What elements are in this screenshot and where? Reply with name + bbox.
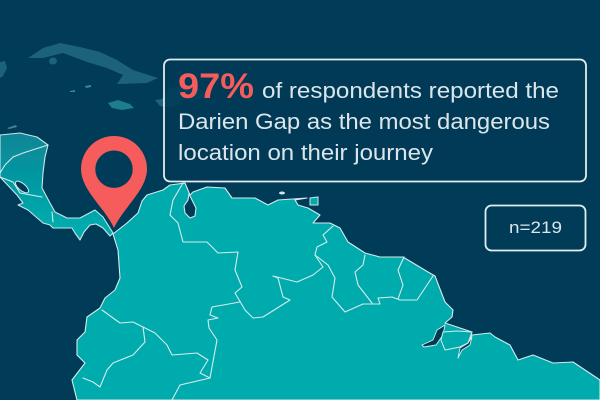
island: Hispaniola	[155, 85, 207, 108]
island: Isle of Youth	[49, 58, 57, 64]
Amazon delta channels	[422, 325, 472, 358]
island: Cuba	[28, 43, 158, 84]
island: Margarita	[279, 192, 285, 194]
sample size box	[486, 206, 586, 250]
country borders	[0, 145, 433, 400]
border: Ecuador and Peru	[83, 327, 145, 387]
text line 2: Darien Gap as the most dangerous	[178, 109, 550, 134]
text line 3: location on their journey	[178, 140, 433, 165]
sample size label: n=219	[509, 218, 562, 237]
island: Jamaica	[108, 100, 134, 110]
border: Guyana and Suriname	[355, 255, 372, 303]
border: Central America	[0, 145, 53, 222]
callout box	[164, 60, 586, 182]
lake: Nicaragua	[14, 179, 30, 195]
Trinidad and nearby islands	[310, 197, 318, 205]
Marajo island	[441, 331, 472, 350]
statistic: 97%: 97%	[178, 67, 254, 106]
lake: Maracaibo	[184, 194, 196, 218]
border: Colombia and Venezuela	[170, 183, 333, 318]
border: Peru and Brazil	[172, 378, 210, 400]
border: Guyana, Suriname, French Guiana and Brazil	[315, 255, 433, 312]
island: Bahamas edge	[0, 61, 7, 78]
callout: main statistic	[164, 60, 586, 182]
border: Colombia, Brazil, Peru and Ecuador	[102, 302, 240, 378]
land: Central America	[0, 133, 113, 240]
caribbean islands	[0, 43, 207, 129]
land: South America	[72, 183, 600, 400]
sample size outline	[486, 206, 586, 250]
icon: location pin	[81, 136, 147, 228]
border: Suriname and French Guiana	[398, 257, 404, 299]
text line 1: of respondents reported the	[262, 78, 559, 103]
island: small cays	[7, 85, 91, 129]
